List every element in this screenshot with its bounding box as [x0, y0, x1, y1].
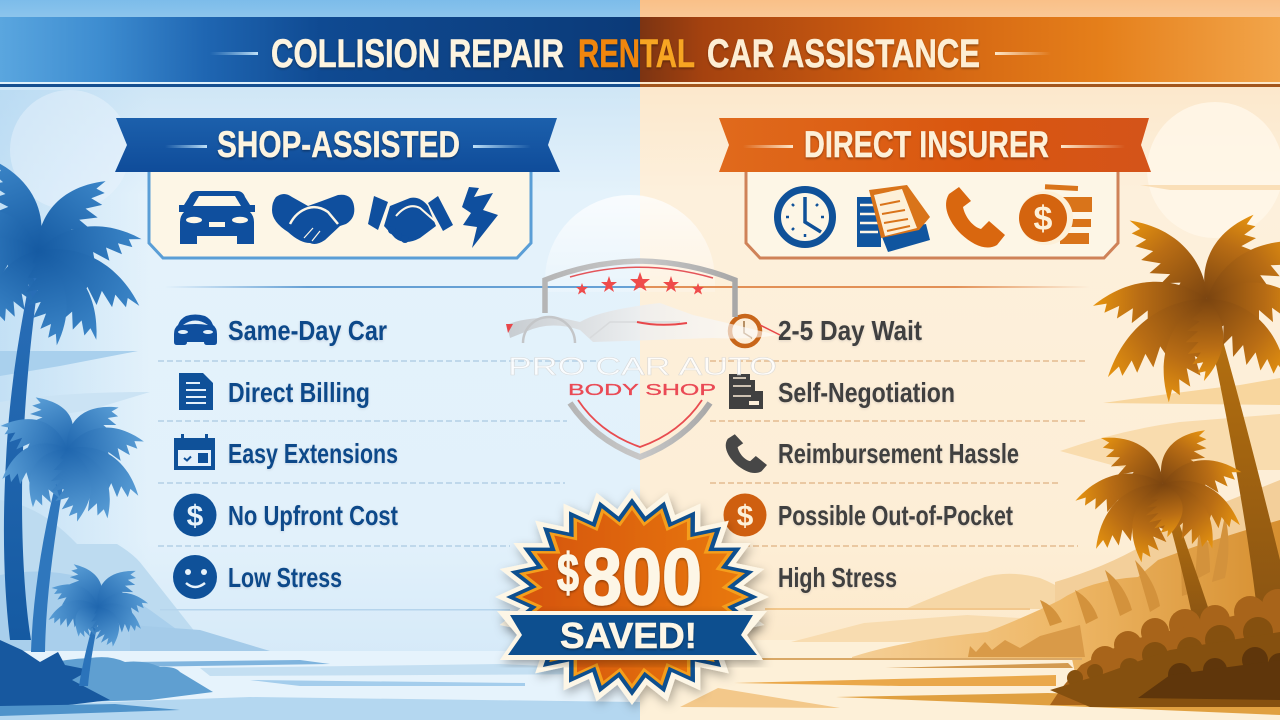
brand subtitle: BODY SHOP: [568, 382, 716, 399]
row: same-day car: Same-Day Car: [228, 315, 387, 346]
icon: lightning bolt: [462, 187, 498, 248]
logo: pro car auto body shop: [506, 261, 780, 457]
row: possible out-of-pocket: $: [737, 500, 754, 533]
palm tree: small blue: [46, 557, 150, 686]
palm tree: medium blue: [0, 388, 149, 652]
banner: shop-assisted: [115, 118, 560, 172]
row: direct billing: [179, 373, 370, 410]
title banner: [0, 17, 1280, 87]
saved label: SAVED!: [560, 615, 697, 656]
dividers: right column: [640, 286, 1090, 546]
title text: TAL: [640, 32, 695, 76]
row: high stress: High Stress: [778, 562, 897, 593]
panel: direct insurer icon card: [746, 170, 1118, 258]
stars: [576, 272, 704, 294]
bushes: right foreground: [1050, 589, 1280, 707]
dividers: left column: [158, 286, 640, 610]
icon: coin and cash: $: [1034, 200, 1053, 238]
row: 2-5 day wait: 2-5 Day Wait: [778, 315, 922, 346]
starburst: [495, 489, 769, 705]
title text: [271, 32, 980, 76]
palm tree: large blue: [0, 152, 150, 640]
background: orange half: [640, 0, 1280, 720]
palm tree: small orange: [1073, 419, 1249, 625]
badge: $800 saved: [495, 489, 769, 705]
title text: CAR ASSISTANCE: [707, 32, 980, 76]
panel: shop-assisted icon card: [149, 170, 531, 258]
row: same-day car: [174, 314, 387, 346]
banner: shop-assisted: SHOP-ASSISTED: [217, 124, 460, 165]
icon: car: [179, 191, 255, 244]
car silhouette: [506, 303, 780, 343]
banner: direct insurer: DIRECT INSURER: [804, 124, 1049, 165]
icon: handshake solid: [272, 194, 354, 244]
row: possible out-of-pocket: Possible Out-of-Pocket: [778, 500, 1013, 531]
icon: documents: [857, 185, 930, 252]
icon: clock: [778, 190, 832, 244]
background: blue half: [0, 0, 640, 720]
icon: phone: [946, 187, 1005, 248]
row: reimbursement hassle: [726, 434, 1019, 473]
icon: coin and cash: [1019, 184, 1092, 245]
row: no upfront cost: No Upfront Cost: [228, 500, 398, 531]
list: direct insurer drawbacks: [724, 315, 1019, 593]
row: self-negotiation: Self-Negotiation: [778, 377, 955, 408]
row: direct billing: Direct Billing: [228, 377, 370, 408]
title text: COLLISION REPAIR: [271, 32, 564, 76]
scene: right hills and beach: [640, 480, 1280, 720]
list: shop-assisted benefits: [173, 314, 398, 599]
title text: REN: [578, 32, 640, 76]
icon: handshake with cuffs: [368, 196, 453, 243]
row: possible out-of-pocket: [724, 494, 1013, 536]
row: 2-5 day wait: [730, 315, 922, 346]
scene: left beach: [0, 640, 640, 720]
row: easy extensions: Easy Extensions: [228, 438, 398, 469]
row: reimbursement hassle: Reimbursement Hassle: [778, 438, 1019, 469]
row: no upfront cost: [174, 494, 398, 536]
row: low stress: [173, 555, 342, 599]
banner: direct insurer: [719, 118, 1151, 172]
row: easy extensions: [174, 434, 398, 470]
ribbon: [497, 611, 767, 660]
row: no upfront cost: $: [187, 500, 204, 533]
sun behind logo: [545, 195, 715, 292]
brand name: PRO CAR AUTO: [508, 353, 777, 381]
amount: 800: [582, 532, 702, 621]
amount: $: [557, 543, 579, 603]
row: self-negotiation: [729, 374, 955, 409]
row: low stress: Low Stress: [228, 562, 342, 593]
shield outline: [545, 261, 735, 457]
palm tree: large orange: [1093, 205, 1280, 620]
